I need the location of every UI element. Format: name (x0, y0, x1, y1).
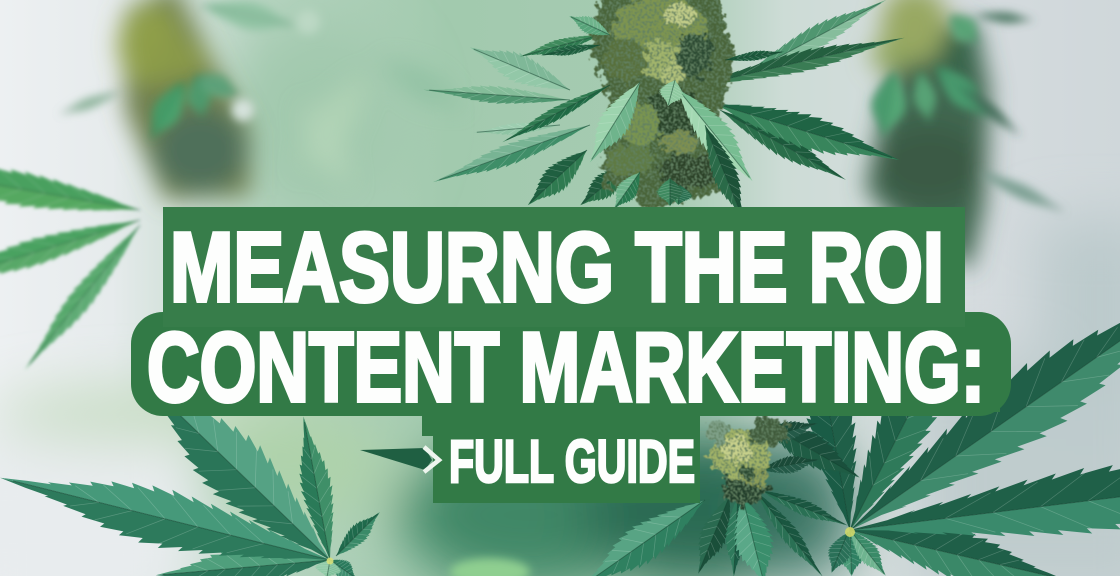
bottom left cannabis plant (0, 355, 387, 576)
blurred centre foliage (279, 46, 475, 203)
blurred plant: top left (57, 0, 320, 200)
banner: second line (131, 312, 1011, 416)
title banner backing (131, 207, 1011, 503)
arrow: leaf pointer (360, 447, 439, 472)
bottom centre bud and leaves (571, 405, 868, 576)
glow: leaf centre (845, 527, 855, 537)
blurred plant: top right (864, 0, 1069, 270)
bottom right cannabis plant (790, 254, 1120, 576)
banner: third line (422, 405, 1000, 503)
glow: leaf centre (326, 558, 334, 564)
central cannabis bud and leaves (423, 0, 907, 227)
left cannabis leaves (0, 151, 149, 377)
banner: first line (163, 207, 965, 327)
subtitle: full guide: FULL GUIDE (449, 428, 695, 495)
